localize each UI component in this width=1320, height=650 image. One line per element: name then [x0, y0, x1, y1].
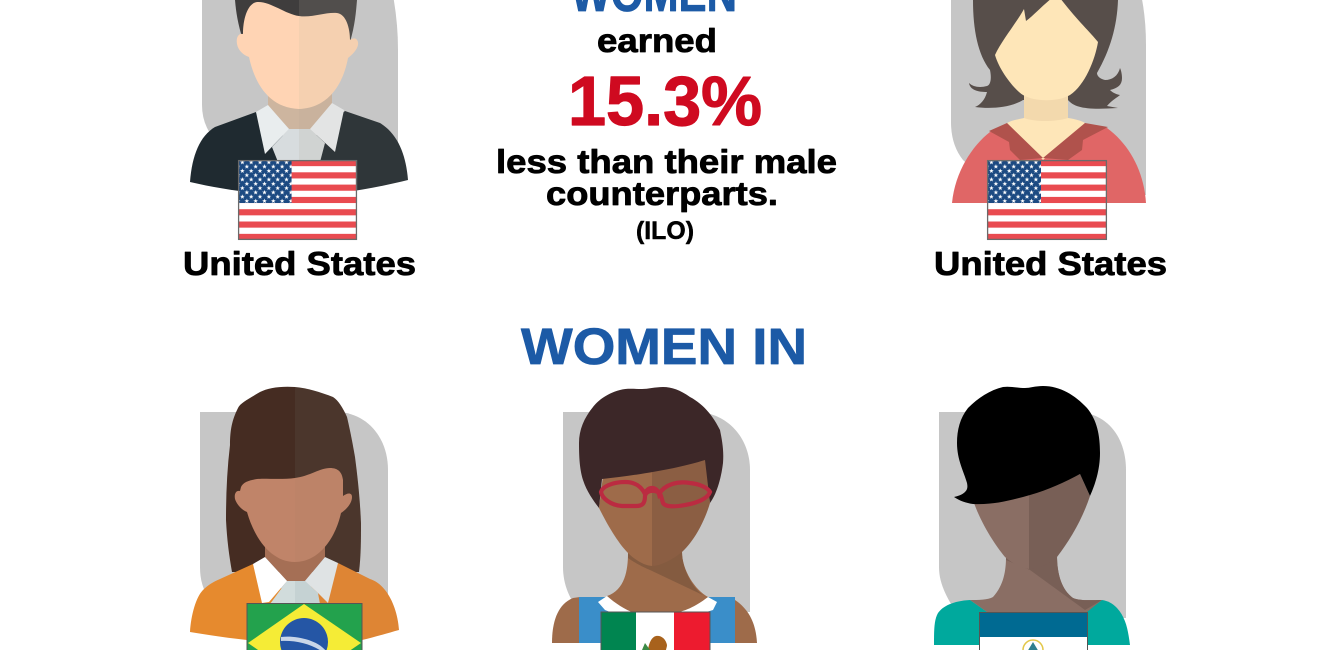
neck — [265, 540, 325, 581]
grey backdrop — [939, 412, 1126, 618]
neck — [268, 90, 299, 130]
flag: El Salvador — [980, 612, 1088, 650]
heading: WOMEN IN: WOMEN IN — [521, 318, 807, 375]
collar — [989, 123, 1108, 160]
neck — [607, 552, 708, 613]
stat: 15.3%: 15.3% — [568, 62, 762, 140]
blouse — [952, 128, 1146, 203]
tie — [270, 581, 295, 604]
woman figure: United States — [951, 0, 1146, 240]
text: counterparts.: counterparts. — [546, 175, 778, 212]
shirt — [190, 564, 295, 640]
grey backdrop — [563, 412, 750, 612]
neck — [970, 555, 1102, 612]
text: less than their male: less than their male — [496, 143, 837, 180]
hair — [235, 0, 299, 40]
hair — [226, 387, 295, 572]
face — [599, 462, 652, 566]
face — [235, 478, 295, 562]
jacket — [190, 112, 299, 195]
text: earned: earned — [597, 22, 717, 59]
grey backdrop — [200, 412, 388, 600]
flag: United States — [238, 160, 357, 240]
flag: Brazil — [247, 604, 362, 650]
neckline trim — [598, 596, 717, 620]
grey backdrop — [202, 0, 398, 175]
text: source ILO: (ILO) — [636, 217, 694, 245]
hair — [579, 387, 723, 508]
label: United States (left): United States — [183, 245, 416, 282]
grey backdrop — [951, 0, 1146, 195]
woman figure: Mexico — [552, 387, 757, 650]
collar — [256, 105, 289, 154]
top — [579, 597, 735, 643]
woman figure: Brazil — [190, 387, 399, 650]
face — [237, 2, 299, 109]
hair — [954, 386, 1100, 504]
flag: United States — [987, 160, 1107, 240]
man figure: United States — [190, 0, 408, 240]
face — [974, 490, 1029, 569]
glasses — [601, 482, 710, 506]
shirt and tie — [272, 129, 299, 162]
shoulders — [934, 600, 990, 645]
flag: Mexico — [601, 612, 710, 650]
chest — [1007, 118, 1085, 160]
label: United States (right): United States — [934, 245, 1167, 282]
collar — [253, 557, 287, 603]
face — [995, 0, 1098, 100]
woman figure: El Salvador — [934, 386, 1130, 650]
neck — [1024, 90, 1068, 122]
hair — [969, 0, 1122, 109]
arms — [552, 597, 580, 643]
